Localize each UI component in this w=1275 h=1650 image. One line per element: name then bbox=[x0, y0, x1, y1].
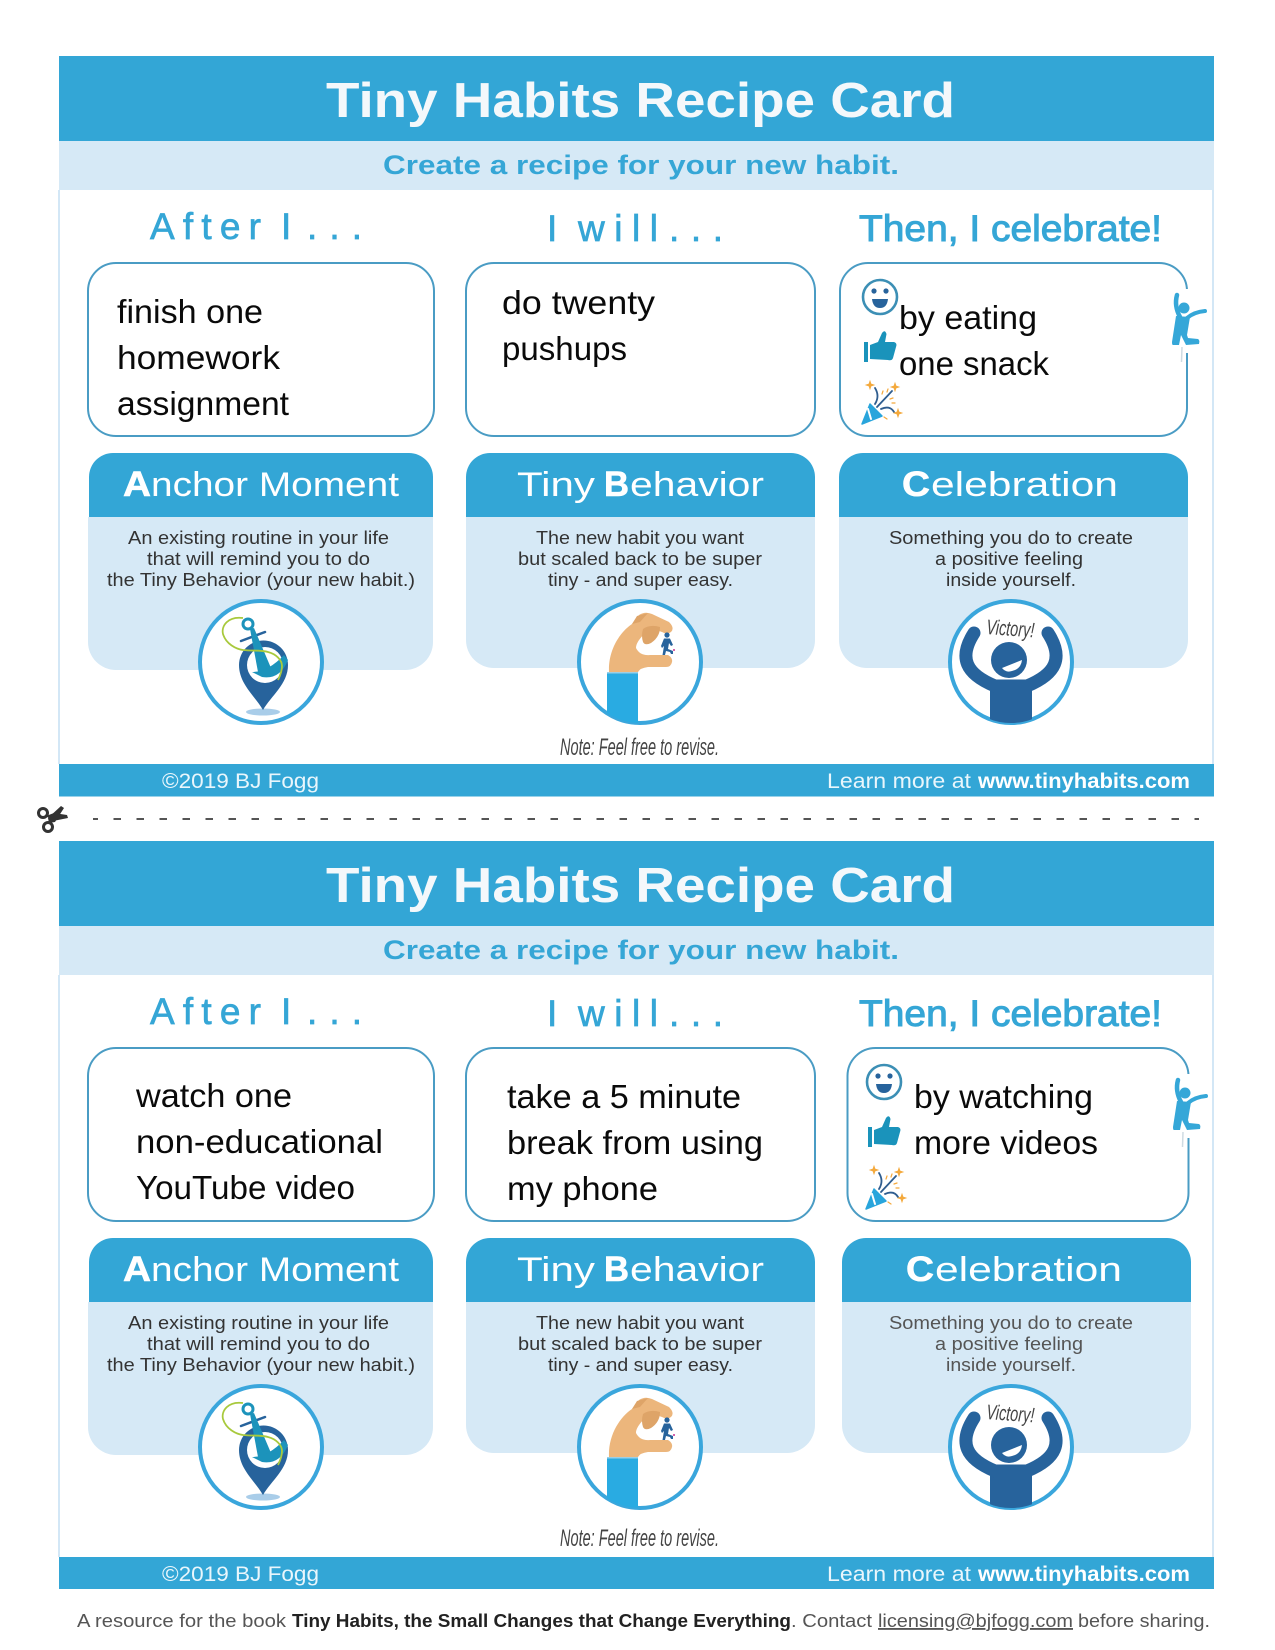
resource credit line: licensing@bjfogg.com bbox=[878, 1610, 1073, 1631]
box: celebration answer bbox=[848, 1048, 1188, 1221]
panel: anchor moment: that will remind you to do bbox=[147, 548, 370, 569]
panel: celebration: a positive feeling bbox=[935, 1333, 1083, 1354]
note: Note: Feel free to revise. bbox=[560, 1525, 719, 1552]
icon: anchor pin bbox=[200, 601, 322, 723]
icon: pinching hand bbox=[579, 1386, 701, 1512]
icon: jumping figure bbox=[1172, 289, 1205, 362]
panel: celebration: a positive feeling bbox=[935, 548, 1083, 569]
icon: party popper bbox=[862, 381, 902, 424]
panel: tiny behavior: tiny - and super easy. bbox=[548, 569, 733, 590]
box: behavior answer bbox=[466, 263, 815, 436]
panel: celebration: inside yourself. bbox=[946, 1354, 1076, 1375]
panel: celebration: C bbox=[902, 465, 930, 504]
title banner: Tiny Habits Recipe Card bbox=[326, 859, 955, 913]
panel: celebration: Something you do to create bbox=[889, 527, 1133, 548]
panel: tiny behavior: Tiny bbox=[517, 1251, 595, 1289]
resource credit line: A resource for the book bbox=[77, 1610, 287, 1631]
box: behavior answer bbox=[466, 1048, 815, 1221]
heading: I will: I bbox=[547, 993, 557, 1034]
panel: tiny behavior bbox=[466, 1238, 815, 1453]
resource credit line bbox=[77, 1610, 1210, 1631]
heading: I will bbox=[547, 993, 723, 1034]
panel: celebration: C bbox=[906, 1250, 934, 1289]
panel: celebration: inside yourself. bbox=[946, 569, 1076, 590]
footer bar bbox=[59, 1557, 1214, 1589]
panel: anchor moment: the Tiny Behavior (your new habit.) bbox=[107, 569, 415, 590]
panel: tiny behavior: ehavior bbox=[630, 1251, 764, 1289]
panel: anchor moment: nchor Moment bbox=[151, 466, 400, 504]
panel: anchor moment: A bbox=[123, 465, 151, 504]
box: behavior answer: do twenty bbox=[502, 284, 656, 321]
subtitle band: Create a recipe for your new habit. bbox=[383, 150, 899, 180]
footer bar: ©2019 BJ Fogg bbox=[162, 770, 319, 793]
footer bar: www.tinyhabits.com bbox=[977, 1563, 1190, 1586]
cut line bbox=[93, 818, 1199, 820]
heading: After I: . . . bbox=[307, 206, 362, 247]
heading: Then, I celebrate: Then, I celebrate! bbox=[859, 208, 1162, 249]
icon: thumbs up bbox=[868, 1116, 900, 1147]
panel: celebration: Something you do to create bbox=[889, 1312, 1133, 1333]
footer bar: ©2019 BJ Fogg bbox=[162, 1563, 319, 1586]
heading: I will: will bbox=[577, 993, 658, 1034]
box: celebration answer bbox=[840, 263, 1187, 436]
heading: After I: . . . bbox=[307, 991, 362, 1032]
icon: victory figure bbox=[950, 1386, 1072, 1515]
icon: anchor pin bbox=[200, 1386, 322, 1508]
icon: pinching hand bbox=[579, 601, 701, 727]
panel: celebration bbox=[839, 453, 1188, 668]
subtitle band bbox=[59, 926, 1214, 975]
resource credit line: . Contact bbox=[791, 1610, 872, 1631]
panel: tiny behavior: The new habit you want bbox=[536, 527, 744, 548]
box: celebration answer: by watching bbox=[914, 1078, 1093, 1115]
footer bar: Learn more at bbox=[827, 770, 971, 793]
icon: victory figure bbox=[950, 601, 1072, 730]
resource credit line: before sharing. bbox=[1078, 1610, 1210, 1631]
panel: anchor moment bbox=[88, 453, 433, 670]
subtitle band: Create a recipe for your new habit. bbox=[383, 935, 899, 965]
top recipe card bbox=[59, 56, 1214, 796]
bottom recipe card bbox=[59, 841, 1214, 1589]
footer bar: Learn more at bbox=[827, 1563, 971, 1586]
heading: After I bbox=[150, 206, 362, 247]
heading: After I bbox=[150, 991, 362, 1032]
icon: victory figure: Victory! bbox=[986, 616, 1035, 642]
title banner bbox=[59, 56, 1214, 141]
box: celebration answer: more videos bbox=[914, 1124, 1098, 1161]
panel: tiny behavior bbox=[466, 453, 815, 668]
box: anchor answer bbox=[88, 263, 434, 436]
heading: I will: . . . bbox=[669, 993, 723, 1034]
panel: celebration: elebration bbox=[935, 1251, 1122, 1289]
box: anchor answer: non-educational bbox=[136, 1123, 383, 1160]
box: anchor answer: assignment bbox=[117, 385, 289, 422]
panel: tiny behavior: ehavior bbox=[630, 466, 764, 504]
title banner bbox=[59, 841, 1214, 926]
heading: After I: I bbox=[281, 991, 291, 1032]
panel: anchor moment bbox=[88, 1238, 433, 1455]
panel: tiny behavior: The new habit you want bbox=[536, 1312, 744, 1333]
box: behavior answer: pushups bbox=[502, 330, 627, 367]
panel: anchor moment: that will remind you to do bbox=[147, 1333, 370, 1354]
icon: smiley bbox=[863, 280, 897, 314]
heading: I will: . . . bbox=[669, 208, 723, 249]
icon: scissors bbox=[38, 806, 68, 832]
box: anchor answer: YouTube video bbox=[136, 1169, 355, 1206]
box: anchor answer: watch one bbox=[135, 1077, 292, 1114]
panel: anchor moment: An existing routine in your life bbox=[128, 527, 389, 548]
panel: tiny behavior: but scaled back to be super bbox=[518, 1333, 762, 1354]
box: behavior answer: break from using bbox=[507, 1124, 763, 1161]
heading: I will bbox=[547, 208, 723, 249]
footer bar: www.tinyhabits.com bbox=[977, 770, 1190, 793]
icon: smiley bbox=[867, 1065, 901, 1099]
box: behavior answer: my phone bbox=[507, 1170, 658, 1207]
box: anchor answer: finish one bbox=[117, 293, 263, 330]
panel: tiny behavior: but scaled back to be super bbox=[518, 548, 762, 569]
panel: tiny behavior: B bbox=[604, 1250, 629, 1289]
heading: I will: will bbox=[577, 208, 658, 249]
heading: I will: I bbox=[547, 208, 557, 249]
icon: victory figure: Victory! bbox=[986, 1401, 1035, 1427]
panel: tiny behavior: tiny - and super easy. bbox=[548, 1354, 733, 1375]
heading: Then, I celebrate: Then, I celebrate! bbox=[859, 993, 1162, 1034]
panel: celebration bbox=[842, 1238, 1191, 1453]
heading: After I: I bbox=[281, 206, 291, 247]
box: celebration answer: one snack bbox=[899, 345, 1049, 382]
title banner: Tiny Habits Recipe Card bbox=[326, 74, 955, 128]
panel: anchor moment: the Tiny Behavior (your new habit.) bbox=[107, 1354, 415, 1375]
resource credit line: Tiny Habits, the Small Changes that Change Everything bbox=[292, 1610, 791, 1631]
panel: tiny behavior: Tiny bbox=[517, 466, 595, 504]
panel: anchor moment: A bbox=[123, 1250, 151, 1289]
box: behavior answer: take a 5 minute bbox=[507, 1078, 741, 1115]
panel: anchor moment: nchor Moment bbox=[151, 1251, 400, 1289]
footer bar bbox=[59, 764, 1214, 796]
panel: celebration: elebration bbox=[931, 466, 1118, 504]
panel: tiny behavior: B bbox=[604, 465, 629, 504]
icon: thumbs up bbox=[864, 331, 896, 362]
box: celebration answer: by eating bbox=[899, 299, 1037, 336]
heading: After I: After bbox=[150, 991, 261, 1032]
box: anchor answer bbox=[88, 1048, 434, 1221]
subtitle band bbox=[59, 141, 1214, 190]
box: anchor answer: homework bbox=[117, 339, 281, 376]
heading: After I: After bbox=[150, 206, 261, 247]
panel: anchor moment: An existing routine in your life bbox=[128, 1312, 389, 1333]
icon: party popper bbox=[866, 1166, 906, 1209]
note: Note: Feel free to revise. bbox=[560, 734, 719, 761]
icon: jumping figure bbox=[1173, 1074, 1206, 1147]
